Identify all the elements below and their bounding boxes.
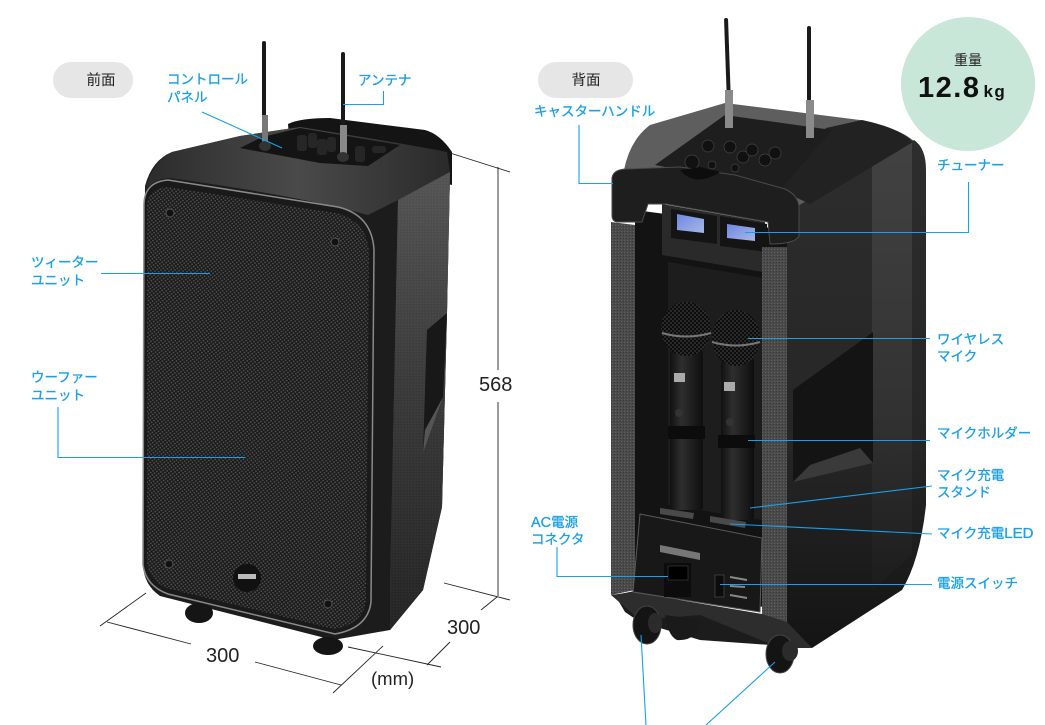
front grille frame [143,180,374,634]
front knobs [297,133,386,162]
front antenna 1 [259,41,271,151]
label: caster handle: キャスターハンドル [534,104,655,119]
weight badge [901,17,1035,151]
AC socket [664,563,691,597]
back side face [787,140,926,648]
front side panel [390,172,450,630]
back antenna 1 [724,18,733,128]
back top shell [624,103,915,215]
label: woofer unit: ユニット [31,388,85,403]
tuner modules [671,209,767,252]
pill: back label [538,62,633,98]
tuner plate [662,204,765,272]
front side notch [423,313,447,453]
microphone 1 [661,302,711,510]
label: tweeter unit: ツィーター [31,255,98,270]
label: mic holder: マイクホルダー [937,426,1031,441]
back top control panel [655,115,832,190]
dimension lines [100,153,510,693]
microphone 2 [712,310,760,520]
pill: back label: 背面 [572,72,600,89]
front body [143,127,450,640]
back antenna 2 [806,26,814,138]
power switch [715,575,747,598]
front antenna 2 [337,52,349,162]
blue leader lines [58,91,968,725]
grille screws [165,209,339,608]
back underside [615,590,790,645]
label: control panel: パネル [167,90,208,105]
label: wireless mic: マイク [937,349,977,364]
back recess [635,210,787,610]
front handle [288,118,452,185]
back side handle recess [793,332,873,482]
label: tuner: チューナー [937,158,1004,173]
dimension: width: 300 [206,645,239,667]
weight badge: 重量 [954,52,982,68]
label: wireless mic: ワイヤレス [937,332,1004,347]
logo badge [233,564,261,592]
pill: front label: 前面 [86,72,116,89]
label: tweeter unit: ユニット [31,273,85,288]
front grille mesh [147,187,369,629]
wheel right [766,635,798,673]
back bevel [780,120,913,204]
front control recess [240,128,400,166]
front feet [185,603,343,655]
charging stand [660,508,746,528]
back knobs [685,140,781,172]
back handle [612,167,799,244]
label: antenna: アンテナ [358,73,411,88]
back foot [665,615,700,640]
back right column [762,247,787,625]
label: woofer unit: ウーファー [31,370,98,385]
label: mic charging LED: マイク充電LED [937,525,1034,542]
label: AC connector: AC電源 [531,515,578,531]
label: AC connector: コネクタ [531,532,584,547]
dimension: height: 568 [479,374,512,396]
back bottom frame [611,592,812,648]
back side lighter ridge [872,142,912,590]
panel spec text block [660,545,700,560]
wheel left [633,606,662,644]
front speaker [143,41,452,655]
dimension: depth: 300 [447,617,480,639]
label: power switch: 電源スイッチ [937,576,1018,591]
back speaker [611,18,926,673]
label: mic charging stand: マイク充電 [937,468,1004,483]
front top shell [145,127,450,215]
lower black panel [668,262,763,520]
label: control panel: コントロール [167,72,248,87]
weight badge: 12.8kg [918,72,1006,104]
AC power panel [633,514,762,612]
dimension: unit: (mm) [371,668,414,689]
back left column [611,222,635,595]
pill: front label [53,62,133,98]
label: mic charging stand: スタンド [937,485,991,500]
handle grip [680,167,720,180]
